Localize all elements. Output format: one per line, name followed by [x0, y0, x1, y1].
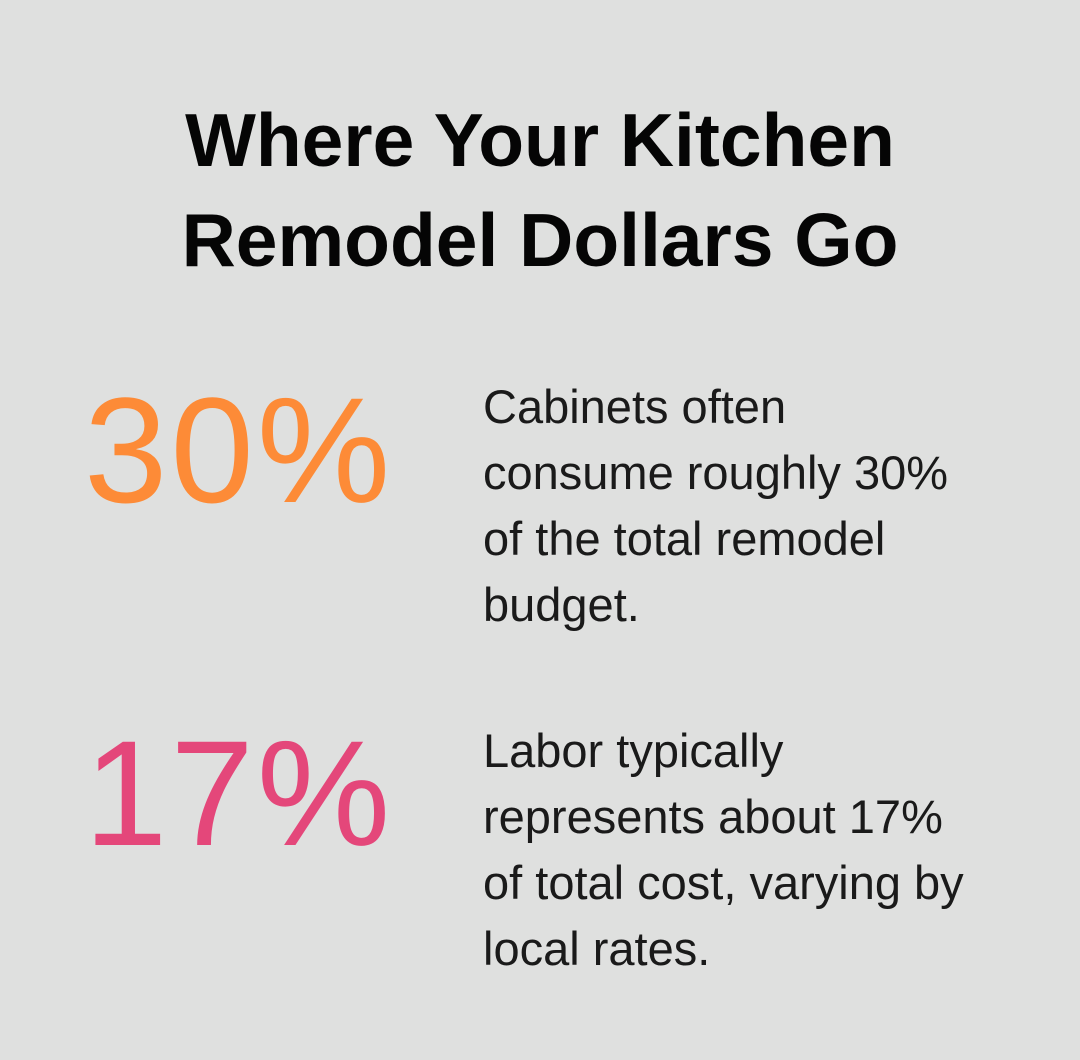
text: labor description [483, 724, 964, 975]
stat: 17%: 17% [84, 709, 393, 877]
text: labor description: of total cost, varying by [483, 856, 964, 909]
title: Remodel Dollars Go [182, 198, 898, 282]
text: labor description: represents about 17% [483, 790, 943, 843]
title: Where Your Kitchen [185, 98, 895, 182]
text: cabinets description: consume roughly 30% [483, 446, 948, 499]
text: labor description: local rates. [483, 922, 710, 975]
title [182, 98, 898, 282]
text: cabinets description: of the total remodel [483, 512, 885, 565]
stat: 30%: 30% [84, 366, 393, 534]
text: labor description: Labor typically [483, 724, 783, 777]
text: cabinets description: Cabinets often [483, 380, 786, 433]
text: cabinets description: budget. [483, 578, 640, 631]
text: cabinets description [483, 380, 948, 631]
